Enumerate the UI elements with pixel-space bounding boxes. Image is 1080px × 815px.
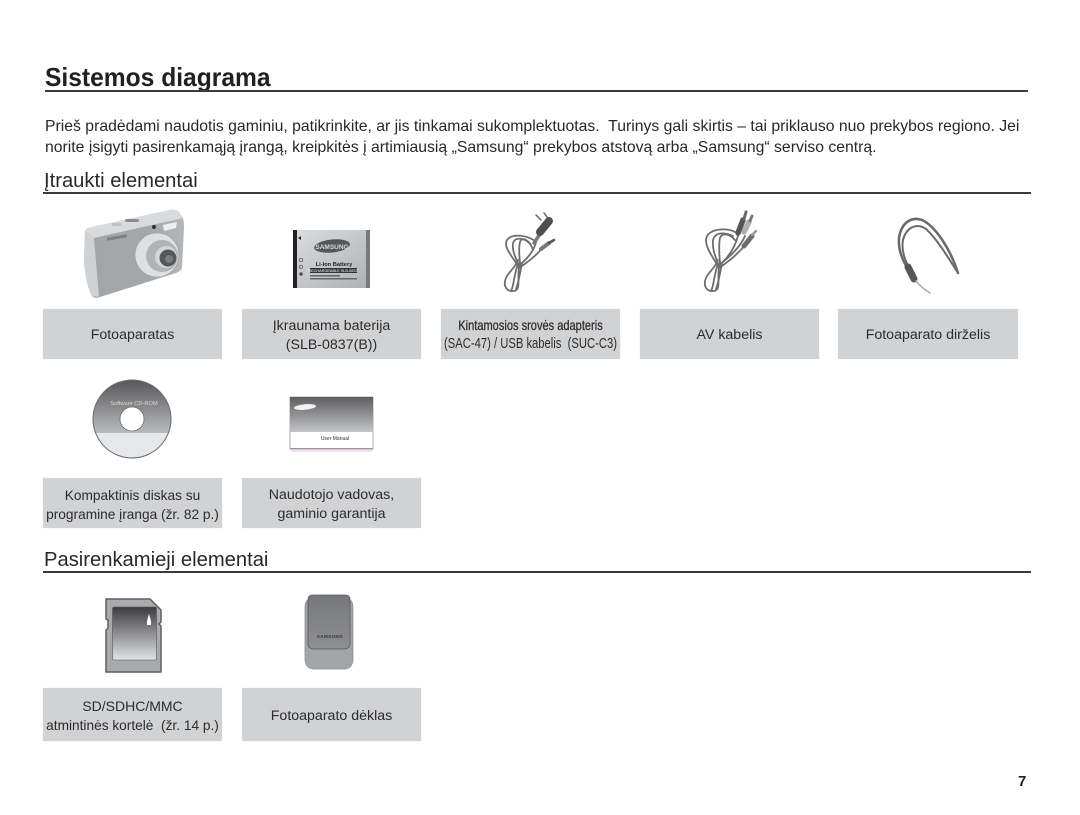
label: battery — [242, 309, 421, 359]
icon: battery: RECHARGEABLE SLB-0837 — [308, 269, 358, 273]
icon: battery — [293, 230, 370, 288]
label: memory card — [43, 688, 222, 741]
label: adapter and USB cable: (SAC-47) / USB kabelis (SUC-C3) — [444, 336, 617, 352]
icon: camera case: SAMSUNG — [317, 634, 343, 639]
label: CD — [43, 478, 222, 528]
icon: wrist strap — [899, 219, 958, 293]
icon: adapter and USB cable — [505, 213, 554, 291]
label: manual — [242, 478, 421, 528]
label: strap — [838, 309, 1018, 359]
intro text: Prieš pradėdami naudotis gaminiu, patikrinkite, ar jis tinkamai sukomplektuotas. Turinys gali skirtis – tai priklauso nuo prekybos regiono. Jei — [45, 118, 1019, 135]
label: strap: Fotoaparato dirželis — [866, 327, 990, 343]
label: adapter and USB cable — [441, 309, 620, 359]
icon: CD-ROM — [93, 380, 171, 458]
label: CD: Kompaktinis diskas su — [65, 488, 200, 502]
icon: battery: Li-Ion Battery — [316, 262, 353, 268]
label: camera: Fotoaparatas — [91, 327, 174, 343]
label: manual: Naudotojo vadovas, — [269, 486, 394, 502]
label: CD: programine įranga (žr. 82 p.) — [46, 506, 219, 522]
title: Sistemos diagrama — [45, 62, 271, 92]
label: camera — [43, 309, 222, 359]
heading: included items: Įtraukti elementai — [44, 170, 198, 192]
icon: AV cable — [705, 212, 756, 291]
label: camera case — [242, 688, 421, 741]
label: battery: Įkraunama baterija — [273, 318, 390, 334]
heading: optional items: Pasirenkamieji elementai — [44, 549, 268, 571]
page number: 7 — [1018, 773, 1026, 790]
icon: user manual — [290, 397, 373, 452]
icon: battery: SAMSUNG — [315, 244, 349, 251]
intro text: norite įsigyti pasirenkamąją įrangą, kreipkitės į artimiausią „Samsung“ prekybos atstovą arba „Samsung“ serviso centrą. — [45, 139, 877, 156]
label: AV cable: AV kabelis — [696, 327, 762, 343]
label: memory card: SD/SDHC/MMC — [82, 698, 183, 714]
icon: camera — [84, 210, 184, 298]
label: battery: (SLB-0837(B)) — [286, 336, 377, 352]
label: camera case: Fotoaparato dėklas — [271, 708, 392, 724]
icon: camera case — [305, 595, 353, 669]
label: memory card: atmintinės kortelė (žr. 14 p.) — [46, 718, 219, 732]
icon: SD memory card — [106, 599, 161, 672]
icon: user manual: User Manual — [321, 436, 349, 442]
label: AV cable — [640, 309, 819, 359]
label: manual: gaminio garantija — [277, 506, 386, 522]
label: adapter and USB cable: Kintamosios srovės adapteris — [458, 317, 603, 333]
icon: CD-ROM: Software CD-ROM — [110, 401, 158, 407]
intro text — [45, 118, 1019, 156]
